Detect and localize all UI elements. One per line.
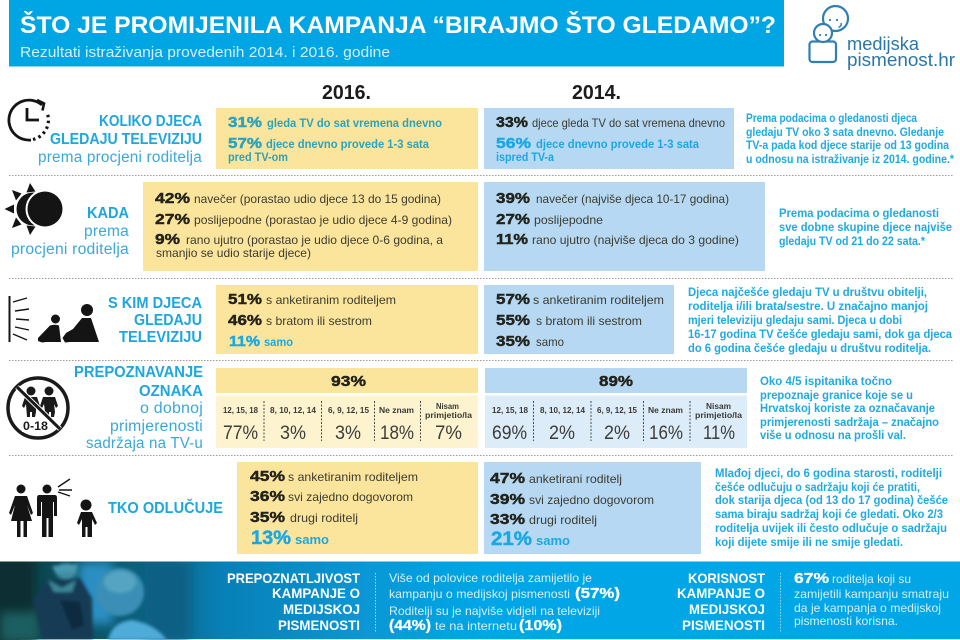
note: company while watching: 16-17 godina TV češće gledaju sami, dok ga djeca bbox=[688, 329, 953, 341]
logo: medijska pismenost bbox=[810, 6, 955, 70]
panel: 2016 rating recognition: 6, 9, 12, 15 bbox=[328, 406, 370, 415]
logo: medijska pismenost: pismenost.hr bbox=[847, 49, 955, 70]
footer band bbox=[0, 562, 960, 640]
panel: 2016 rating recognition: 7% bbox=[435, 423, 462, 444]
title banner bbox=[9, 0, 784, 66]
note: viewing time: sve dobne skupine djece najviše bbox=[779, 222, 952, 234]
panel: 2014 how much: ispred TV-a bbox=[496, 152, 555, 164]
panel: 2016 how much: 57% bbox=[228, 135, 262, 152]
panel: 2014 who decides: 33% bbox=[490, 511, 525, 528]
label: s kim djeca gledaju bbox=[108, 295, 202, 346]
footer text: campaign recognition: Roditelji su je najviše vidjeli na televiziji bbox=[389, 604, 600, 618]
panel: 2014 rating recognition: Nisam bbox=[706, 402, 731, 411]
footer text: campaign recognition bbox=[389, 571, 620, 634]
panel: 2014 who decides: 47% bbox=[490, 470, 525, 487]
panel: 2014 with whom: s anketiranim roditeljem bbox=[533, 293, 664, 307]
panel: 2016 who decides: 35% bbox=[250, 509, 285, 526]
year heading 2014: 2014. bbox=[572, 82, 621, 104]
panel: 2016 when: 27% bbox=[155, 211, 190, 228]
panel: 2016 who decides: svi zajedno dogovorom bbox=[288, 490, 413, 504]
label: koliko djeca gledaju: GLEDAJU TELEVIZIJU bbox=[50, 131, 202, 148]
note: who decides by age: roditelja uvijek ili često odlučuje o sadržaju bbox=[715, 523, 947, 535]
panel: 2014 with whom bbox=[484, 285, 674, 354]
footer text: campaign usefulness bbox=[794, 570, 949, 628]
panel: 2016 how much: pred TV-om bbox=[228, 152, 288, 164]
label: kada: KADA bbox=[87, 205, 129, 222]
panel: 2014 when: rano ujutro (najviše djeca do 3 godine) bbox=[532, 233, 739, 247]
icon: age rating sign 0-18 bbox=[8, 378, 68, 438]
label: prepoznavanje oznaka: OZNAKA bbox=[139, 383, 203, 400]
footer heading: korisnost: KAMPANJE O bbox=[677, 585, 765, 601]
panel: 2014 how much: djece dnevno provede 1-3 sata bbox=[536, 139, 700, 151]
panel: 2014 when: poslijepodne bbox=[534, 213, 603, 227]
footer text: campaign usefulness: pismenosti korisna. bbox=[794, 614, 898, 628]
panel: 2014 when: 27% bbox=[496, 211, 530, 228]
note: viewing hours bbox=[746, 113, 954, 166]
panel: 2016 rating recognition bbox=[216, 368, 478, 448]
panel: 2016 how much bbox=[216, 108, 478, 169]
label: kada bbox=[11, 205, 129, 258]
icon: sun and moon bbox=[4, 183, 64, 235]
footer heading: korisnost: MEDIJSKOJ bbox=[689, 601, 765, 617]
note: who decides by age bbox=[715, 468, 948, 549]
panel: 2016 rating recognition: 3% bbox=[335, 423, 361, 444]
panel: 2016 when: 42% bbox=[155, 190, 190, 207]
note: who decides by age: dok starija djeca (od 13 do 17 godina) češće bbox=[715, 495, 948, 507]
footer text: campaign usefulness: da je kampanja o medijskoj bbox=[794, 601, 941, 615]
panel: 2016 with whom: 51% bbox=[228, 291, 262, 308]
panel: 2014 rating recognition: 2% bbox=[604, 423, 630, 444]
panel: 2014 when: 11% bbox=[496, 231, 528, 248]
panel: 2014 rating recognition: 6, 9, 12, 15 bbox=[597, 406, 638, 415]
note: viewing hours: Prema podacima o gledanosti djeca bbox=[746, 113, 918, 125]
panel: 2016 when: 9% bbox=[155, 231, 180, 248]
panel: 2016 who decides: drugi roditelj bbox=[290, 511, 358, 525]
panel: 2016 rating recognition: primjetio/la bbox=[425, 411, 473, 420]
label: koliko djeca gledaju: prema procjeni roditelja bbox=[38, 149, 202, 166]
panel: 2016 with whom: s anketiranim roditeljem bbox=[266, 293, 396, 307]
label: prepoznavanje oznaka: PREPOZNAVANJE bbox=[74, 364, 203, 381]
panel: 2014 with whom: 57% bbox=[496, 291, 530, 308]
panel: 2014 when: navečer (najviše djeca 10-17 godina) bbox=[536, 192, 729, 206]
panel: 2014 who decides bbox=[484, 462, 701, 554]
note: rating limits bbox=[760, 376, 939, 442]
panel: 2014 when bbox=[484, 182, 765, 271]
panel: 2016 how much: gleda TV do sat vremena dnevno bbox=[267, 118, 442, 130]
label: prepoznavanje oznaka: o dobnoj bbox=[140, 400, 203, 417]
panel: 2014 who decides: svi zajedno dogovorom bbox=[529, 493, 654, 507]
panel: 2016 who decides: s anketiranim roditeljem bbox=[288, 470, 418, 484]
footer heading: prepoznatljivost: PISMENOSTI bbox=[278, 617, 360, 633]
note: who decides by age: češće odlučuju o sadržaju koji će pratiti, bbox=[715, 482, 920, 494]
panel: 2016 with whom bbox=[216, 285, 478, 354]
panel: 2016 rating recognition: Ne znam bbox=[379, 406, 414, 415]
label: prepoznavanje oznaka: primjerenosti bbox=[110, 418, 203, 435]
panel: 2016 how much: 31% bbox=[228, 114, 262, 131]
panel: 2016 who decides bbox=[237, 462, 478, 554]
panel: 2014 with whom: 35% bbox=[496, 333, 530, 350]
note: rating limits: Oko 4/5 ispitanika točno bbox=[760, 376, 892, 388]
panel: 2016 rating recognition: 77% bbox=[223, 423, 258, 444]
panel: 2014 rating recognition: 8, 10, 12, 14 bbox=[540, 406, 586, 415]
panel: 2016 when: rano ujutro (porastao je udio djece 0-6 godina, a bbox=[186, 233, 443, 247]
panel: 2014 who decides: samo bbox=[536, 533, 570, 548]
footer heading: korisnost: KORISNOST bbox=[688, 570, 765, 586]
note: rating limits: Hrvatskoj koriste za označavanje bbox=[760, 403, 935, 415]
footer heading: prepoznatljivost bbox=[227, 570, 360, 633]
title banner: ŠTO JE PROMIJENILA KAMPANJA “BIRAJMO ŠTO GLEDAMO”? bbox=[20, 11, 776, 39]
panel: 2016 who decides: 36% bbox=[250, 488, 285, 505]
panel: 2016 with whom: 11% bbox=[229, 333, 260, 350]
footer text: campaign recognition: (10%) bbox=[519, 617, 562, 634]
footer photo: children, tinted bbox=[0, 555, 190, 640]
panel: 2014 when: 39% bbox=[496, 190, 530, 207]
panel: 2016 rating recognition: 3% bbox=[280, 423, 306, 444]
panel: 2016 with whom: 46% bbox=[228, 312, 262, 329]
panel: 2016 when: navečer (porastao udio djece 13 do 15 godina) bbox=[194, 192, 441, 206]
note: rating limits: prepoznaje granice koje se u bbox=[760, 390, 913, 402]
icon: age rating sign 0-18: 0-18 bbox=[23, 419, 48, 433]
panel: 2014 rating recognition bbox=[485, 368, 747, 448]
panel: 2014 rating recognition: Ne znam bbox=[648, 406, 683, 415]
panel: 2014 who decides: anketirani roditelj bbox=[529, 472, 622, 486]
note: who decides by age: sama biraju sadržaj koji će gledati. Oko 2/3 bbox=[715, 509, 943, 521]
footer heading: korisnost bbox=[677, 570, 765, 633]
footer text: campaign usefulness: roditelja koji su bbox=[832, 572, 911, 586]
label: s kim djeca gledaju: S KIM DJECA bbox=[108, 295, 202, 312]
panel: 2014 who decides: 39% bbox=[490, 491, 525, 508]
label: prepoznavanje oznaka: sadržaja na TV-u bbox=[86, 435, 203, 452]
label: tko odlucuje: TKO ODLUČUJE bbox=[108, 499, 223, 517]
footer heading: prepoznatljivost: MEDIJSKOJ bbox=[283, 601, 360, 617]
footer heading: korisnost: PISMENOSTI bbox=[682, 617, 765, 633]
panel: 2016 who decides: 45% bbox=[250, 468, 285, 485]
panel: 2016 rating recognition: 18% bbox=[380, 423, 414, 444]
logo: medijska pismenost: medijska bbox=[847, 33, 920, 54]
panel: 2016 with whom: s bratom ili sestrom bbox=[266, 314, 372, 328]
note: company while watching: roditelja i/ili brata/sestre. U značajno manjoj bbox=[688, 301, 928, 313]
note: company while watching: mjeri televiziju gledaju sami. Djeca u dobi bbox=[688, 315, 902, 327]
panel: 2014 with whom: 55% bbox=[496, 312, 530, 329]
footer text: campaign usefulness: 67% bbox=[794, 570, 829, 587]
icon: adult and child watching tv bbox=[10, 296, 99, 342]
footer text: campaign recognition: te na internetu bbox=[435, 619, 517, 633]
panel: 2014 who decides: 21% bbox=[491, 529, 532, 550]
note: rating limits: više u odnosu na prošli val. bbox=[760, 430, 906, 442]
panel: 2016 when: poslijepodne (porastao je udio djece 4-9 godina) bbox=[194, 213, 452, 227]
note: company while watching: do 6 godina češće gledaju u društvu roditelja. bbox=[688, 343, 931, 355]
year heading 2016: 2016. bbox=[322, 82, 371, 104]
note: rating limits: primjerenosti sadržaja – značajno bbox=[760, 417, 939, 429]
note: viewing time: Prema podacima o gledanosti bbox=[779, 208, 939, 220]
panel: 2014 how much: 56% bbox=[496, 135, 531, 152]
footer text: campaign recognition: (57%) bbox=[575, 585, 620, 602]
panel: 2016 rating recognition: 93% bbox=[331, 373, 366, 390]
label: s kim djeca gledaju: GLEDAJU bbox=[134, 312, 202, 329]
panel: 2016 who decides: 13% bbox=[251, 528, 291, 549]
note: who decides by age: Mlađoj djeci, do 6 godina starosti, roditelji bbox=[715, 468, 942, 480]
panel: 2014 how much: 33% bbox=[496, 114, 528, 131]
panel: 2014 who decides: drugi roditelj bbox=[529, 513, 597, 527]
note: viewing time bbox=[779, 208, 952, 248]
icon: family with speech lines bbox=[9, 479, 97, 537]
icon: clock bbox=[9, 100, 48, 140]
label: koliko djeca gledaju: KOLIKO DJECA bbox=[99, 113, 202, 130]
label: prepoznavanje oznaka bbox=[74, 364, 203, 452]
panel: 2014 rating recognition: 11% bbox=[703, 423, 735, 444]
panel: 2014 rating recognition: 2% bbox=[549, 423, 575, 444]
panel: 2014 with whom: s bratom ili sestrom bbox=[536, 314, 642, 328]
note: who decides by age: koji dijete smije ili ne smije gledati. bbox=[715, 537, 903, 549]
panel: 2014 how much bbox=[484, 108, 734, 169]
panel: 2014 how much: djece gleda TV do sat vremena dnevno bbox=[532, 116, 725, 130]
label: s kim djeca gledaju: TELEVIZIJU bbox=[119, 329, 202, 346]
panel: 2016 rating recognition: 8, 10, 12, 14 bbox=[270, 406, 317, 415]
note: company while watching: Djeca najčešće gledaju TV u društvu obitelji, bbox=[688, 287, 927, 299]
panel: 2016 how much: djece dnevno provede 1-3 sata bbox=[266, 139, 430, 151]
panel: 2016 when bbox=[143, 182, 478, 271]
footer heading: prepoznatljivost: PREPOZNATLJIVOST bbox=[227, 570, 360, 586]
label: koliko djeca gledaju bbox=[38, 113, 202, 166]
note: viewing time: gledaju TV od 21 do 22 sata.* bbox=[779, 236, 925, 248]
panel: 2016 when: smanjio se udio starije djece) bbox=[156, 246, 311, 260]
footer text: campaign recognition: Više od polovice roditelja zamijetilo je bbox=[389, 571, 592, 585]
panel: 2016 with whom: samo bbox=[264, 337, 293, 349]
footer heading: prepoznatljivost: KAMPANJE O bbox=[272, 585, 360, 601]
panel: 2016 rating recognition: Nisam bbox=[436, 402, 459, 411]
panel: 2014 rating recognition: primjetio/la bbox=[695, 411, 743, 420]
label: kada: prema bbox=[84, 223, 129, 240]
panel: 2016 rating recognition: 12, 15, 18 bbox=[223, 406, 259, 415]
panel: 2014 rating recognition: 16% bbox=[649, 423, 683, 444]
panel: 2014 rating recognition: 12, 15, 18 bbox=[492, 406, 529, 415]
panel: 2016 who decides: samo bbox=[295, 532, 329, 547]
panel: 2014 rating recognition: 89% bbox=[599, 373, 633, 390]
footer text: campaign recognition: (44%) bbox=[389, 617, 431, 634]
note: viewing hours: gledaju TV oko 3 sata dnevno. Gledanje bbox=[746, 127, 944, 139]
title banner: Rezultati istraživanja provedenih 2014. i 2016. godine bbox=[20, 44, 390, 61]
label: kada: procjeni roditelja bbox=[11, 241, 129, 258]
footer text: campaign recognition: kampanju o medijskoj pismenosti bbox=[389, 587, 570, 601]
panel: 2014 with whom: samo bbox=[536, 335, 564, 349]
footer text: campaign usefulness: zamijetili kampanju smatraju bbox=[794, 587, 949, 601]
panel: 2014 rating recognition: 69% bbox=[492, 423, 527, 444]
note: company while watching bbox=[688, 287, 953, 355]
